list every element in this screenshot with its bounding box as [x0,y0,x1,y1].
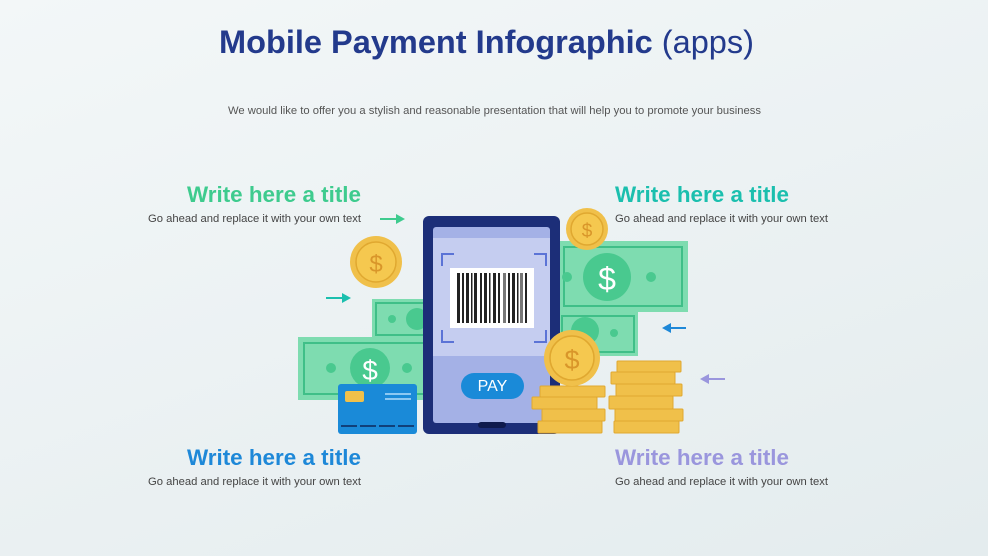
coin: top right: $ [582,221,593,242]
subtitle: We would like to offer you a stylish and reasonable presentation that will help you to promote your business [228,105,762,117]
pay button [461,373,524,399]
arrow: green [380,214,405,224]
text block: top right: Write here a title [615,182,789,207]
title: Mobile Payment Infographic (apps) [219,24,754,60]
text block: bottom left: Write here a title [187,445,361,470]
coin: on stack [544,330,600,386]
coin stacks [532,361,683,433]
pay button: PAY [478,378,508,395]
text block: bottom right: Go ahead and replace it with your own text [615,476,828,488]
credit card [338,384,417,434]
text block: bottom right [615,445,828,488]
barcode [450,268,534,328]
text block: bottom right: Write here a title [615,445,789,470]
arrow: blue [662,323,686,333]
text block: bottom left [148,445,361,488]
coin: left: $ [369,251,383,278]
text block: top right: Go ahead and replace it with your own text [615,213,828,225]
left bills: $ [362,355,378,386]
arrow: teal [326,293,351,303]
coin: top right [566,208,608,250]
coin: left [350,236,402,288]
coin: on stack: $ [564,345,580,375]
text block: top left: Go ahead and replace it with your own text [148,213,361,225]
text block: top left: Write here a title [187,182,361,207]
left bills [298,299,428,400]
text block: top right [615,182,828,225]
arrow: purple [700,374,725,384]
right bills: $ [598,261,616,297]
phone [423,216,560,434]
text block: bottom left: Go ahead and replace it with your own text [148,476,361,488]
text block: top left [148,182,361,225]
right bills [558,241,688,356]
